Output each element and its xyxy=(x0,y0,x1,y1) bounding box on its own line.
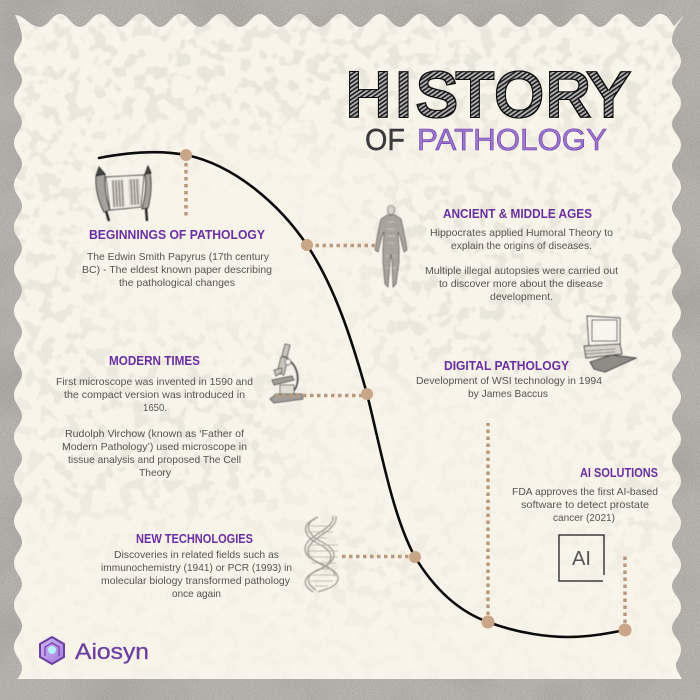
icon: anatomical figure xyxy=(375,206,407,287)
body: the compact version was introduced in xyxy=(64,389,245,401)
text block: beginnings of pathology xyxy=(82,227,272,289)
logo: Aiosyn xyxy=(40,637,149,664)
heading: DIGITAL PATHOLOGY xyxy=(444,358,569,373)
logo mark xyxy=(40,637,64,664)
body xyxy=(425,227,618,303)
body: development. xyxy=(490,291,553,303)
body xyxy=(416,375,602,400)
body: Modern Pathology’) used microscope in xyxy=(62,441,247,453)
body: software to detect prostate xyxy=(521,499,649,511)
body: The Edwin Smith Papyrus (17th century xyxy=(87,251,270,263)
body: molecular biology transformed pathology xyxy=(101,575,291,587)
body xyxy=(82,251,272,289)
body: tissue analysis and proposed The Cell xyxy=(68,454,241,466)
body: explain the origins of diseases. xyxy=(451,240,592,252)
dotted connectors xyxy=(186,163,625,630)
icon: microscope xyxy=(270,344,303,403)
heading: AI SOLUTIONS xyxy=(580,465,658,480)
icon: computer xyxy=(584,316,636,372)
text block: new technologies xyxy=(101,531,292,600)
heading: BEGINNINGS OF PATHOLOGY xyxy=(89,227,265,242)
body: immunochemistry (1941) or PCR (1993) in xyxy=(101,562,292,574)
title line: HISTORY: HISTORY xyxy=(346,61,629,130)
heading: ANCIENT & MIDDLE AGES xyxy=(443,206,592,221)
text block: ancient and middle ages xyxy=(425,206,618,303)
body: Development of WSI technology in 1994 xyxy=(416,375,602,387)
body: Rudolph Virchow (known as ‘Father of xyxy=(65,428,244,440)
body: BC) - The eldest known paper describing xyxy=(82,264,272,276)
timeline curve xyxy=(99,152,625,637)
title line: PATHOLOGY: PATHOLOGY xyxy=(417,122,607,157)
icon: papyrus scroll xyxy=(96,166,151,221)
body: Discoveries in related fields such as xyxy=(114,549,279,561)
icon: DNA helix xyxy=(305,516,338,592)
body: Theory xyxy=(139,467,172,479)
body: Hippocrates applied Humoral Theory to xyxy=(430,227,613,239)
text block: digital pathology xyxy=(416,358,602,400)
title xyxy=(346,61,629,157)
logo wordmark: Aiosyn xyxy=(75,639,149,664)
body xyxy=(56,376,253,479)
icon: AI box xyxy=(559,535,604,581)
body: 1650. xyxy=(143,402,167,414)
title line: OF: OF xyxy=(365,122,405,157)
body: by James Baccus xyxy=(468,388,548,400)
body: FDA approves the first AI-based xyxy=(512,486,658,498)
text block: modern times xyxy=(56,353,253,479)
body: once again xyxy=(172,588,221,600)
body xyxy=(512,486,658,524)
body: to discover more about the disease xyxy=(439,278,603,290)
body xyxy=(101,549,292,600)
timeline nodes xyxy=(180,149,632,636)
heading: NEW TECHNOLOGIES xyxy=(136,531,253,546)
body: the pathological changes xyxy=(119,277,235,289)
icon: AI box: AI xyxy=(572,548,591,570)
text block: AI solutions xyxy=(512,465,658,524)
body: Multiple illegal autopsies were carried out xyxy=(425,265,618,277)
body: First microscope was invented in 1590 and xyxy=(56,376,253,388)
body: cancer (2021) xyxy=(553,512,615,524)
heading: MODERN TIMES xyxy=(109,353,200,368)
